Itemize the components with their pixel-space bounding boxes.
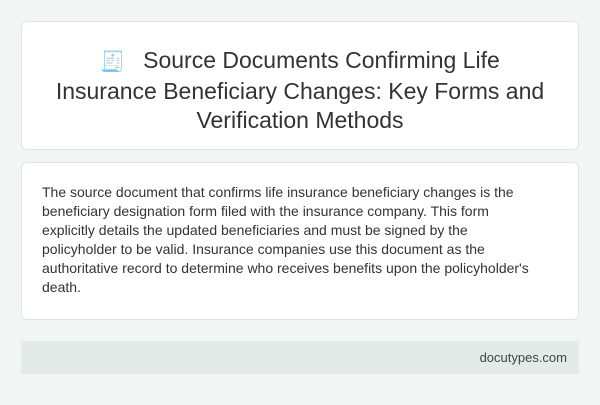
title card	[21, 21, 579, 150]
title	[56, 47, 544, 133]
title: Insurance Beneficiary Changes: Key Forms and	[56, 78, 544, 104]
description card	[21, 162, 579, 320]
title: 🧾 Source Documents Confirming Life	[100, 47, 500, 73]
footer bar: docutypes.com	[480, 350, 567, 365]
footer bar	[21, 341, 579, 374]
title: Verification Methods	[196, 107, 404, 133]
description text: The source document that confirms life insurance beneficiary changes is the beneficiary designation form filed with the insurance company. This form explicitly details the updated beneficiaries and must be signed by the policyholder to be valid. Insurance companies use this document as the authoritative record to determine who receives benefits upon the policyholder's death.	[42, 184, 529, 295]
